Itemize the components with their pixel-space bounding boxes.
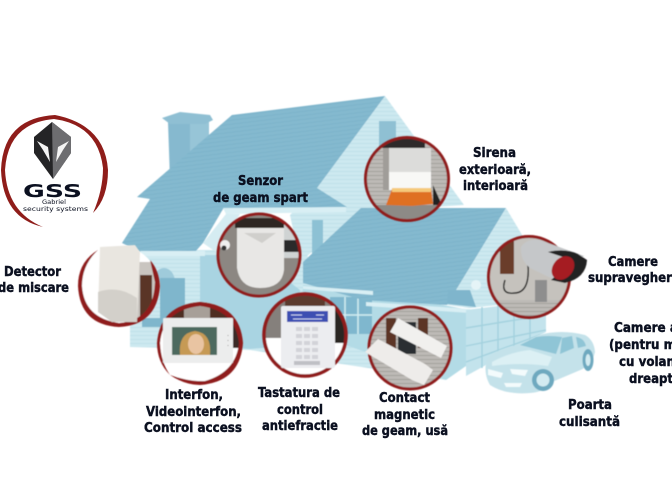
circle: magnetic contact [365, 307, 453, 391]
main roof [122, 96, 385, 252]
label: tastatura: control [277, 403, 323, 418]
car body [486, 332, 595, 393]
logo tagline [23, 199, 89, 213]
label: interfon: Videointerfon, [146, 405, 241, 420]
label: contact: Contact [379, 391, 430, 406]
label: camere auto [609, 321, 672, 387]
logo wordmark: GSS [23, 181, 82, 202]
label: senzor [213, 174, 308, 206]
circle: glass sensor [217, 212, 301, 300]
detector ring [78, 250, 160, 327]
logo tagline: security systems [23, 205, 89, 213]
label: sirena: interioară [463, 179, 528, 194]
keypad ring [264, 294, 346, 376]
intercom buttons [227, 335, 229, 350]
car lights and grille [488, 369, 528, 387]
circle: intercom [157, 302, 243, 386]
keypad keys [294, 327, 320, 365]
dormer gable [203, 214, 240, 252]
small wall window [312, 220, 323, 255]
sensor device [237, 228, 284, 288]
sensor ring [218, 214, 300, 296]
detector device [98, 245, 140, 322]
garage door [466, 300, 546, 376]
right roof [303, 208, 506, 305]
label: senzor: Senzor [238, 174, 284, 189]
wall lamp [471, 280, 481, 290]
label: poarta: Poarta [568, 398, 612, 413]
contact lower bar [365, 339, 433, 385]
label: interfon [144, 388, 242, 436]
logo [1, 115, 108, 227]
label: interfon: Control access [144, 421, 242, 436]
dome camera [220, 240, 230, 250]
contact upper bar [390, 318, 447, 358]
upper gable wall [290, 96, 464, 262]
right gable wall [447, 208, 546, 308]
camera background [489, 237, 568, 317]
right wing lower wall [300, 285, 470, 380]
house illustration [122, 96, 546, 380]
label: detector [0, 265, 69, 296]
label: detector: de miscare [0, 281, 69, 296]
intercom background [159, 302, 240, 382]
label: sirena: Sirena [473, 146, 516, 161]
label: poarta: culisantă [559, 415, 620, 430]
label: sirena [459, 146, 531, 194]
label: contact [362, 391, 448, 439]
sensor detail [244, 233, 276, 243]
label: interfon: Interfon, [165, 388, 223, 403]
label: contact: de geam, usă [362, 424, 448, 439]
logo ring [1, 115, 108, 227]
lower roof trim [140, 251, 205, 256]
label: senzor: de geam spart [213, 191, 308, 206]
camera LEDs [547, 252, 579, 284]
central blue wall [200, 255, 300, 349]
label: tastatura: Tastatura de [258, 386, 340, 401]
camera ring [488, 236, 570, 318]
circle: detector [78, 245, 160, 329]
car wheels [532, 349, 594, 391]
left wing wall [130, 250, 446, 380]
small gable roof [447, 290, 476, 307]
intercom screen [172, 327, 217, 355]
intercom face [180, 331, 210, 355]
siren ring [366, 138, 448, 220]
gable window [379, 121, 396, 150]
car windows [520, 336, 586, 354]
keypad body [281, 306, 335, 368]
label: contact: magnetic [374, 408, 435, 423]
intercom device [163, 318, 233, 363]
circle: siren [364, 136, 452, 222]
siren background [366, 138, 448, 220]
label: poarta [559, 398, 620, 430]
roof trim band [223, 207, 346, 214]
contact background [369, 307, 453, 391]
label: tastatura: antiefractie [262, 419, 338, 434]
label: tastatura [258, 386, 340, 434]
arched window [142, 268, 185, 327]
car hood shine [492, 350, 552, 366]
label: camere: Camere [608, 255, 658, 270]
circle: camera [488, 235, 587, 322]
label: detector: Detector [4, 265, 62, 280]
camera body [521, 240, 584, 280]
siren light [386, 188, 433, 206]
label: sirena: exterioară, [459, 163, 531, 178]
siren body [383, 148, 431, 190]
keypad display [287, 311, 328, 322]
camera hood [548, 250, 587, 283]
intercom ring [157, 302, 243, 385]
keypad background [265, 294, 346, 376]
sensor background [219, 214, 300, 295]
contact ring [369, 307, 451, 389]
roof trim [303, 286, 470, 313]
front windows [330, 297, 372, 334]
detector background [81, 251, 156, 324]
logo helmet [34, 122, 71, 179]
chimney [162, 112, 213, 180]
logo tagline: Gabriel [42, 199, 66, 206]
car [486, 332, 595, 393]
circle: keypad [263, 293, 349, 379]
label: camere [588, 255, 672, 286]
